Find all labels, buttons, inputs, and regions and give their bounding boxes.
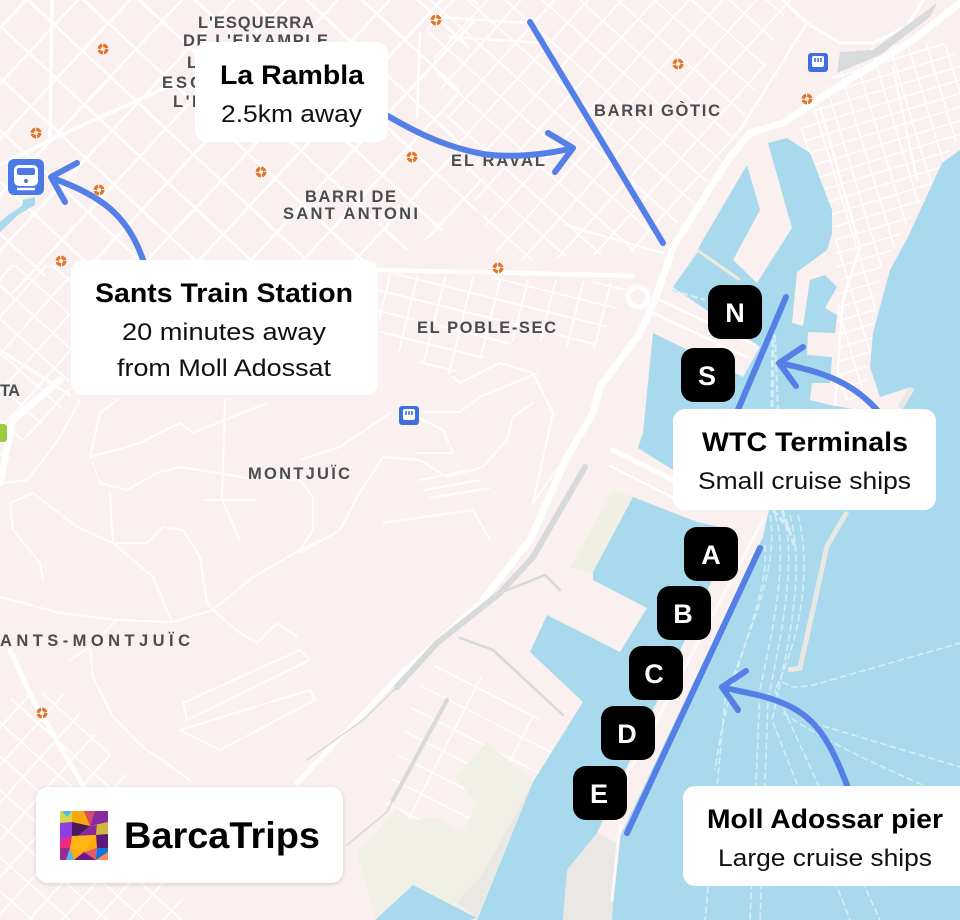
- park areas: [357, 490, 633, 918]
- district labels: L'ESQUERRA: [198, 14, 314, 32]
- icon: train station Poble-sec: [399, 406, 419, 425]
- district labels: TA: [0, 382, 20, 400]
- district labels: BARRI DE: [305, 188, 396, 206]
- district labels: L'E: [173, 93, 203, 111]
- callout: Sants Train Station: Sants Train Station: [95, 278, 353, 308]
- terminal badge: C: [629, 646, 683, 700]
- callout: WTC Terminals: Small cruise ships: [698, 468, 911, 495]
- callout: Sants Train Station: [71, 260, 378, 395]
- terminal badge: D: D: [617, 719, 637, 749]
- terminal badge: E: [573, 766, 627, 820]
- callout: Sants Train Station: from Moll Adossat: [117, 355, 331, 382]
- arrow: to La Rambla: [388, 116, 573, 172]
- terminal badge: S: [681, 348, 735, 402]
- callout: Moll Adossar pier: Large cruise ships: [718, 845, 932, 872]
- railway tracks: [307, 3, 937, 845]
- line: Moll Adossat pier: [627, 548, 760, 833]
- terminal badge: N: N: [725, 298, 745, 328]
- terminal badge: E: E: [590, 779, 608, 809]
- arrow: to Sants station: [51, 163, 143, 260]
- green marker at left edge: [0, 424, 7, 442]
- callout: La Rambla: La Rambla: [220, 60, 365, 90]
- line: La Rambla: [530, 22, 663, 243]
- callout: Sants Train Station: 20 minutes away: [122, 319, 327, 346]
- district labels: EL RAVAL: [451, 152, 545, 170]
- icon: low-poly logo mark: [60, 811, 108, 860]
- terminal badge: S: S: [698, 361, 716, 391]
- callout: WTC Terminals: [673, 409, 936, 510]
- terminal badge: B: [657, 586, 711, 640]
- callout: WTC Terminals: WTC Terminals: [702, 427, 908, 457]
- district labels: [0, 14, 720, 650]
- icon: train station north: [808, 53, 828, 72]
- callout: Moll Adossar pier: Moll Adossar pier: [707, 804, 944, 834]
- terminal badge: A: [684, 527, 738, 581]
- district labels: BARRI GÒTIC: [594, 101, 720, 120]
- water: sea and port: [612, 138, 960, 920]
- Montjuic park paths: [0, 363, 587, 780]
- water: west basin: [477, 497, 735, 920]
- callout: Moll Adossar pier: [683, 786, 960, 886]
- arrow: to WTC terminals: [779, 347, 877, 410]
- district labels: MONTJUÏC: [248, 465, 350, 483]
- water: small canal near Sants: [0, 197, 35, 232]
- callout: La Rambla: 2.5km away: [221, 101, 363, 128]
- logo panel: BarcaTrips: [36, 787, 343, 883]
- terminal badge: B: B: [673, 599, 693, 629]
- district labels: SANT ANTONI: [283, 205, 418, 223]
- district labels: DE L'EIXAMPLE: [183, 32, 328, 50]
- water: south inlet: [375, 885, 477, 920]
- district labels: ESC: [162, 74, 202, 92]
- terminal badge: C: C: [644, 659, 664, 689]
- terminal badge: D: [601, 706, 655, 760]
- district labels: EL POBLE-SEC: [417, 319, 556, 337]
- district labels: L': [187, 54, 201, 72]
- icon: Sants train station: [8, 159, 44, 195]
- shipping routes: [672, 290, 960, 920]
- district labels: ANTS-MONTJUÏC: [0, 632, 190, 650]
- line: WTC terminals: [737, 297, 786, 412]
- brand name: BarcaTrips: [124, 815, 320, 856]
- terminal badge: A: A: [701, 540, 721, 570]
- terminal badge: N: [708, 285, 762, 339]
- metro station markers: [32, 16, 811, 717]
- pier end and breakwaters: [563, 250, 912, 920]
- callout: La Rambla: [195, 42, 388, 142]
- arrow: to Moll Adossat pier: [722, 671, 848, 788]
